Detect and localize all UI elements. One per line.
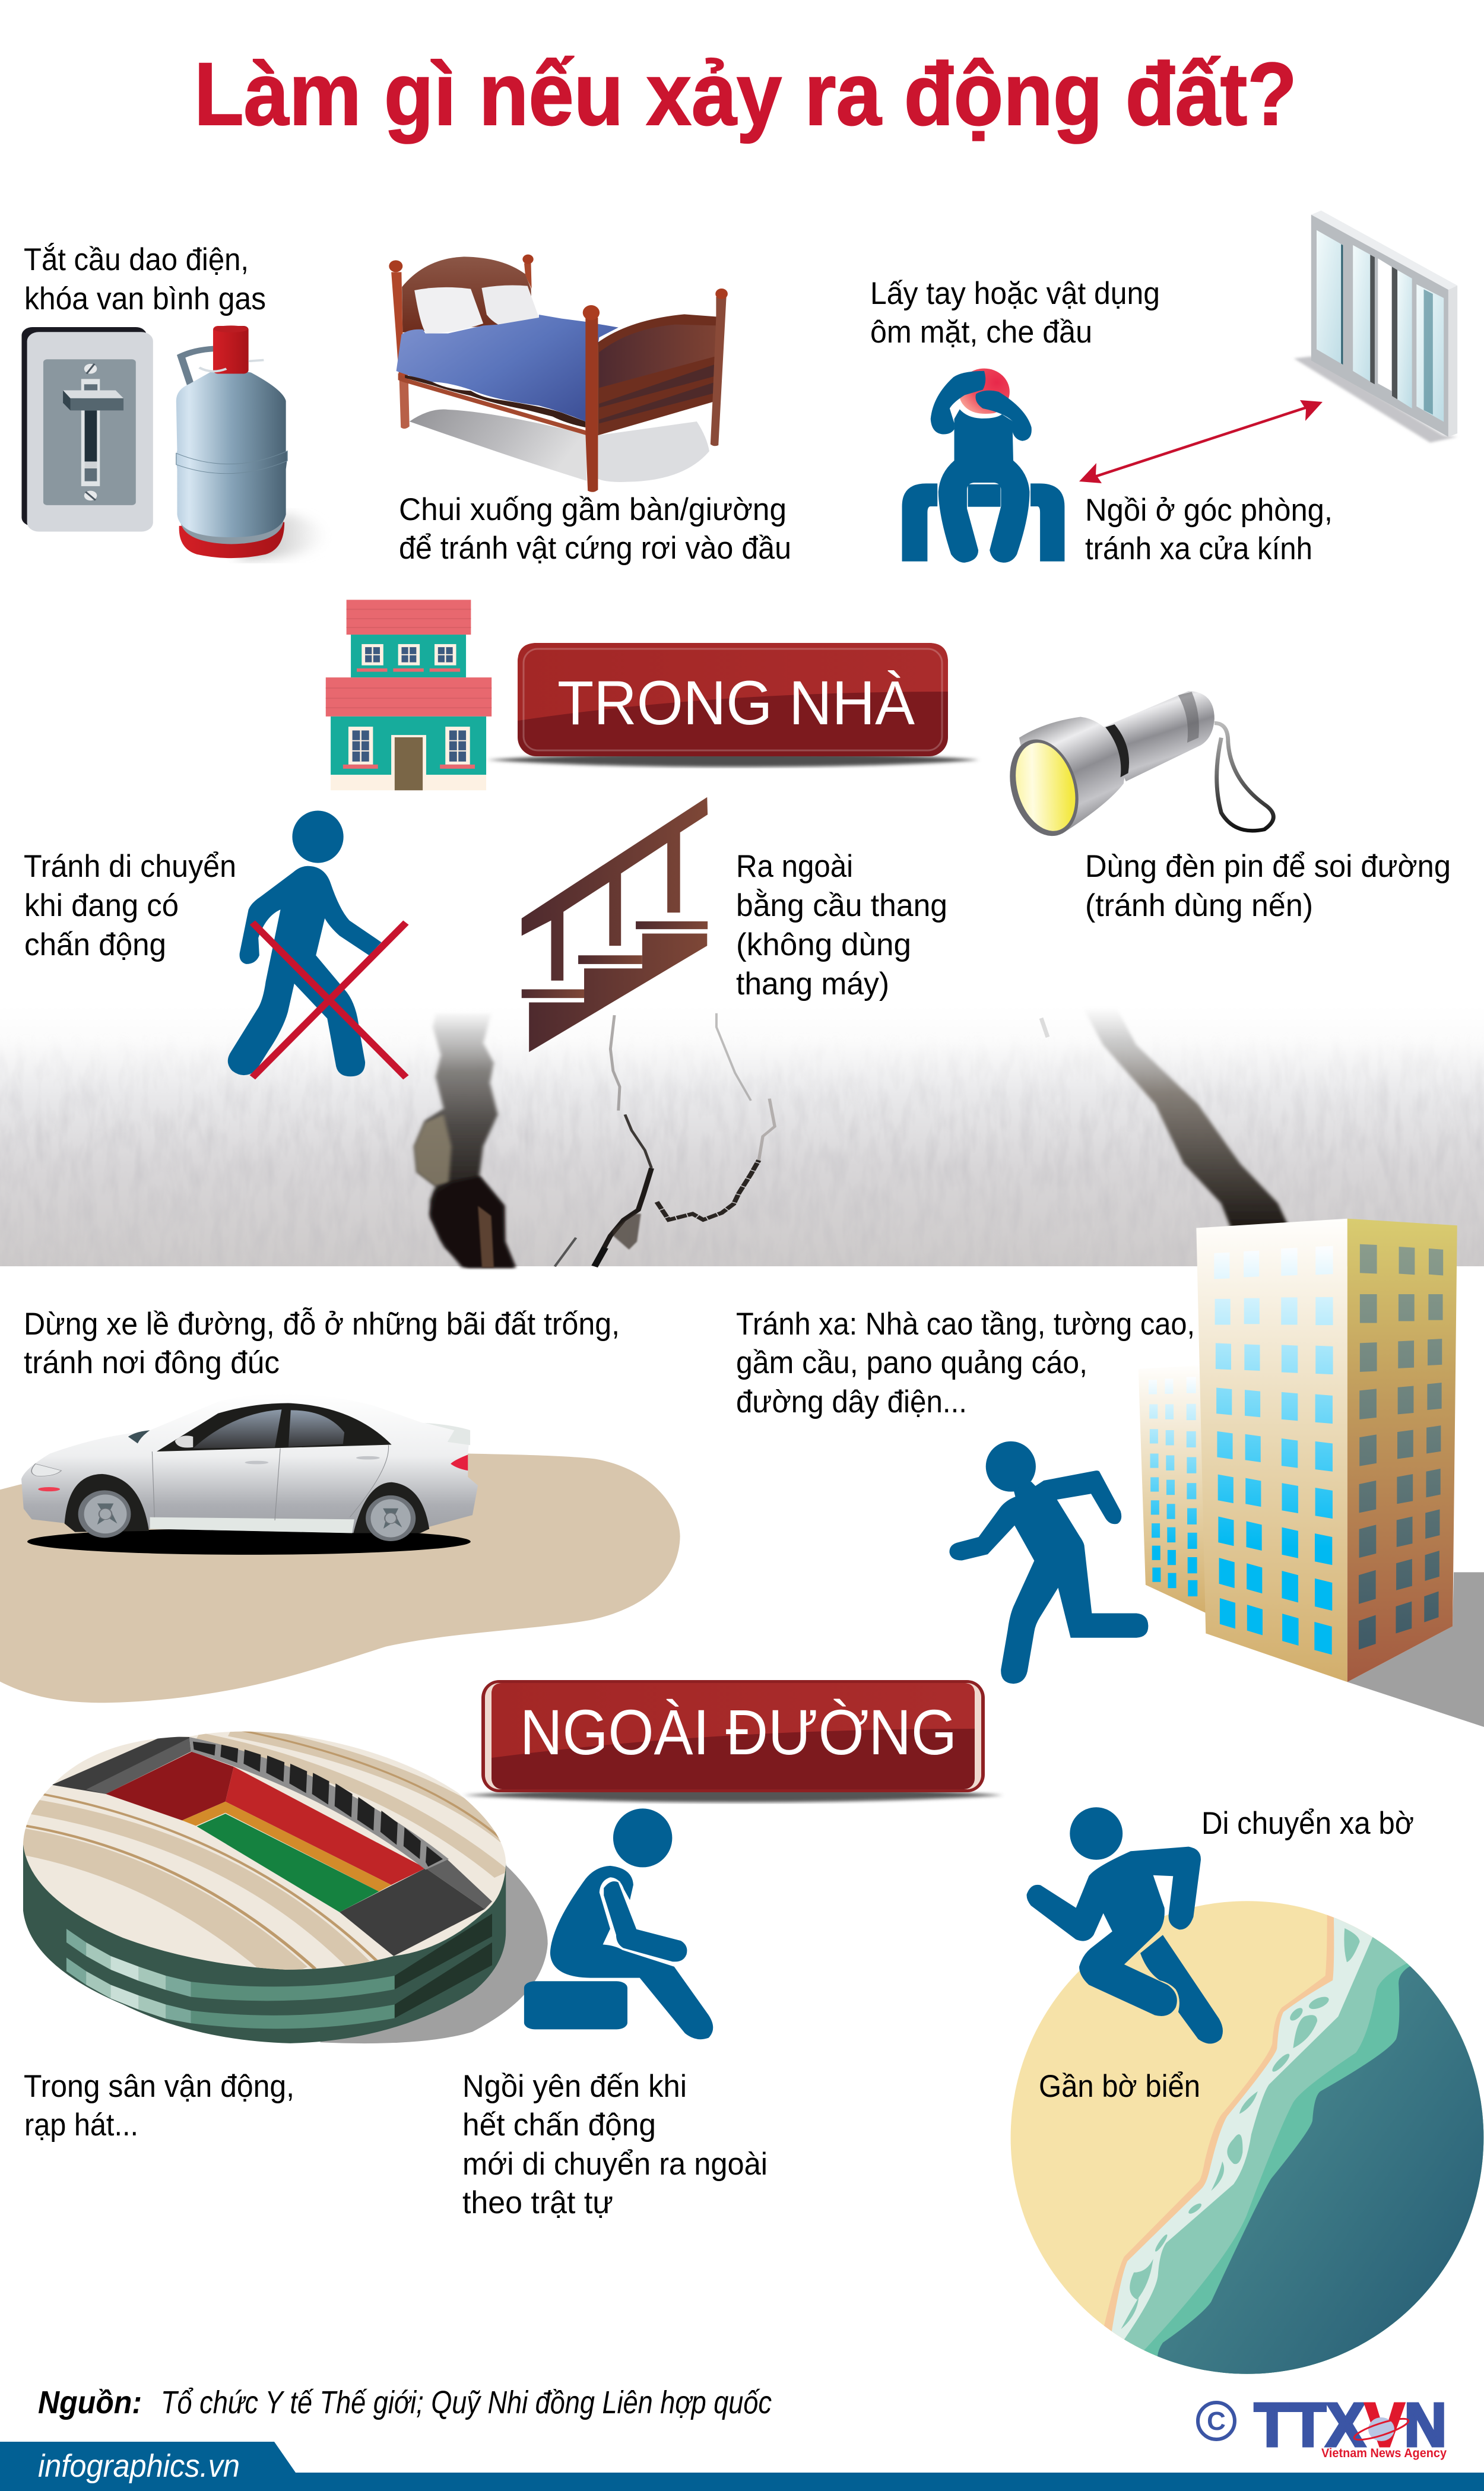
text: use the stairs: (không dùng: [736, 927, 911, 962]
text: turn off power and gas: Tắt cầu dao điện,: [24, 242, 249, 277]
heading badge: NGOÀI ĐƯỜNG: NGOÀI ĐƯỜNG: [520, 1696, 957, 1768]
footer bar: [0, 2442, 1484, 2491]
icon: staircase: [522, 797, 708, 1052]
text: inside stadium or theatre: [24, 2069, 294, 2143]
text: cover face and head: [870, 276, 1160, 350]
text: hide under table or bed: [399, 492, 791, 566]
icon: stadium: [0, 1723, 548, 2043]
text: sit still until shaking stops: hết chấn động: [462, 2107, 656, 2143]
text: turn off power and gas: [24, 242, 266, 316]
text: sit in corner away from glass: [1085, 493, 1333, 566]
text: near the coast: Gần bờ biển: [1039, 2069, 1200, 2104]
footer bar: infographics.vn: [38, 2448, 240, 2484]
text: sit still until shaking stops: mới di chuyển ra ngoài: [462, 2147, 768, 2182]
icon: bed: [389, 255, 728, 492]
title: Làm gì nếu xảy ra động đất?: [194, 44, 1297, 144]
text: avoid moving during shaking: Tránh di chuyển: [24, 849, 236, 884]
cracks: left wide and centre branches: [414, 1013, 775, 1267]
source line: Nguồn:: [38, 2385, 142, 2420]
text: stop the car: tránh nơi đông đúc: [24, 1345, 280, 1380]
text: keep away from tall structures: đường dây điện...: [736, 1384, 967, 1419]
text: move away from shore: Di chuyển xa bờ: [1201, 1806, 1414, 1841]
logo: TTXVN: TTXVN: [1254, 2391, 1447, 2459]
text: stop the car: [24, 1307, 620, 1380]
text: sit in corner away from glass: tránh xa cửa kính: [1085, 531, 1312, 566]
icon: car: [21, 1393, 478, 1555]
red cross: [252, 923, 406, 1077]
text: sit still until shaking stops: Ngồi yên đến khi: [462, 2069, 687, 2104]
text: hide under table or bed: Chui xuống gầm bàn/giường: [399, 492, 787, 527]
text: keep away from tall structures: [736, 1307, 1195, 1419]
panel: cracked ground photo band: [0, 1005, 1484, 1267]
text: avoid moving during shaking: chấn động: [24, 927, 166, 962]
icon: seated person waiting: [524, 1808, 713, 2039]
heading badge: NGOÀI ĐƯỜNG: [463, 1680, 1003, 1802]
facade stripes: [66, 1913, 492, 2029]
icon: person covering head: [902, 369, 1064, 563]
icon: window: [1294, 211, 1457, 443]
arrow: distance from window: [1079, 400, 1323, 483]
text: keep away from tall structures: Tránh xa: Nhà cao tầng, tường cao,: [736, 1307, 1195, 1342]
walking figure: [228, 811, 381, 1076]
logo: TTXVN: Vietnam News Agency: [1321, 2446, 1447, 2460]
icon: runner moving away from shore: [1027, 1807, 1223, 2044]
front wheel: [65, 1474, 149, 1538]
icon: walking person crossed out: [228, 811, 406, 1077]
text: turn off power and gas: khóa van bình gas: [24, 281, 266, 316]
icon: running person: [949, 1441, 1148, 1684]
road patch: [0, 1454, 680, 1703]
icon: coastline circle: [1010, 1901, 1484, 2374]
text: sit still until shaking stops: [462, 2069, 768, 2220]
rear wheel: [353, 1482, 429, 1541]
icon: high-rise buildings: [1139, 1219, 1484, 1727]
text: cover face and head: Lấy tay hoặc vật dụng: [870, 276, 1160, 311]
text: stop the car: Dừng xe lề đường, đỗ ở những bãi đất trống,: [24, 1307, 620, 1342]
text: sit still until shaking stops: theo trật tự: [462, 2185, 613, 2220]
stadium roof and pitch: [23, 1731, 506, 1970]
text: avoid moving during shaking: khi đang có: [24, 888, 179, 923]
crack: right wide: [1041, 1009, 1291, 1238]
text: use the stairs: bằng cầu thang: [736, 888, 947, 923]
logo: TTXVN: C: [1207, 2407, 1226, 2436]
text: sit in corner away from glass: Ngồi ở góc phòng,: [1085, 493, 1333, 528]
text: use the stairs: Ra ngoài: [736, 849, 853, 884]
text: use a flashlight: (tránh dùng nến): [1085, 888, 1313, 923]
icon: light switch: [21, 327, 153, 531]
text: keep away from tall structures: gầm cầu, pano quảng cáo,: [736, 1345, 1087, 1380]
text: use a flashlight: [1085, 849, 1451, 923]
text: use a flashlight: Dùng đèn pin để soi đường: [1085, 849, 1451, 884]
source line: Tổ chức Y tế Thế giới; Quỹ Nhi đồng Liên hợp quốc: [161, 2385, 772, 2420]
text: inside stadium or theatre: rạp hát...: [24, 2107, 138, 2143]
text: use the stairs: thang máy): [736, 966, 889, 1002]
icon: gas cylinder: [176, 325, 325, 559]
text: hide under table or bed: để tránh vật cứng rơi vào đầu: [399, 531, 791, 566]
text: cover face and head: ôm mặt, che đầu: [870, 315, 1092, 350]
text: avoid moving during shaking: [24, 849, 236, 962]
icon: flashlight: [1000, 691, 1273, 842]
text: inside stadium or theatre: Trong sân vận động,: [24, 2069, 294, 2104]
foam pools: [1121, 1928, 1360, 2329]
icon: house: [326, 600, 492, 790]
heading badge: TRONG NHÀ: TRONG NHÀ: [557, 668, 915, 738]
heading badge: TRONG NHÀ: [487, 643, 979, 767]
text: use the stairs: [736, 849, 947, 1002]
